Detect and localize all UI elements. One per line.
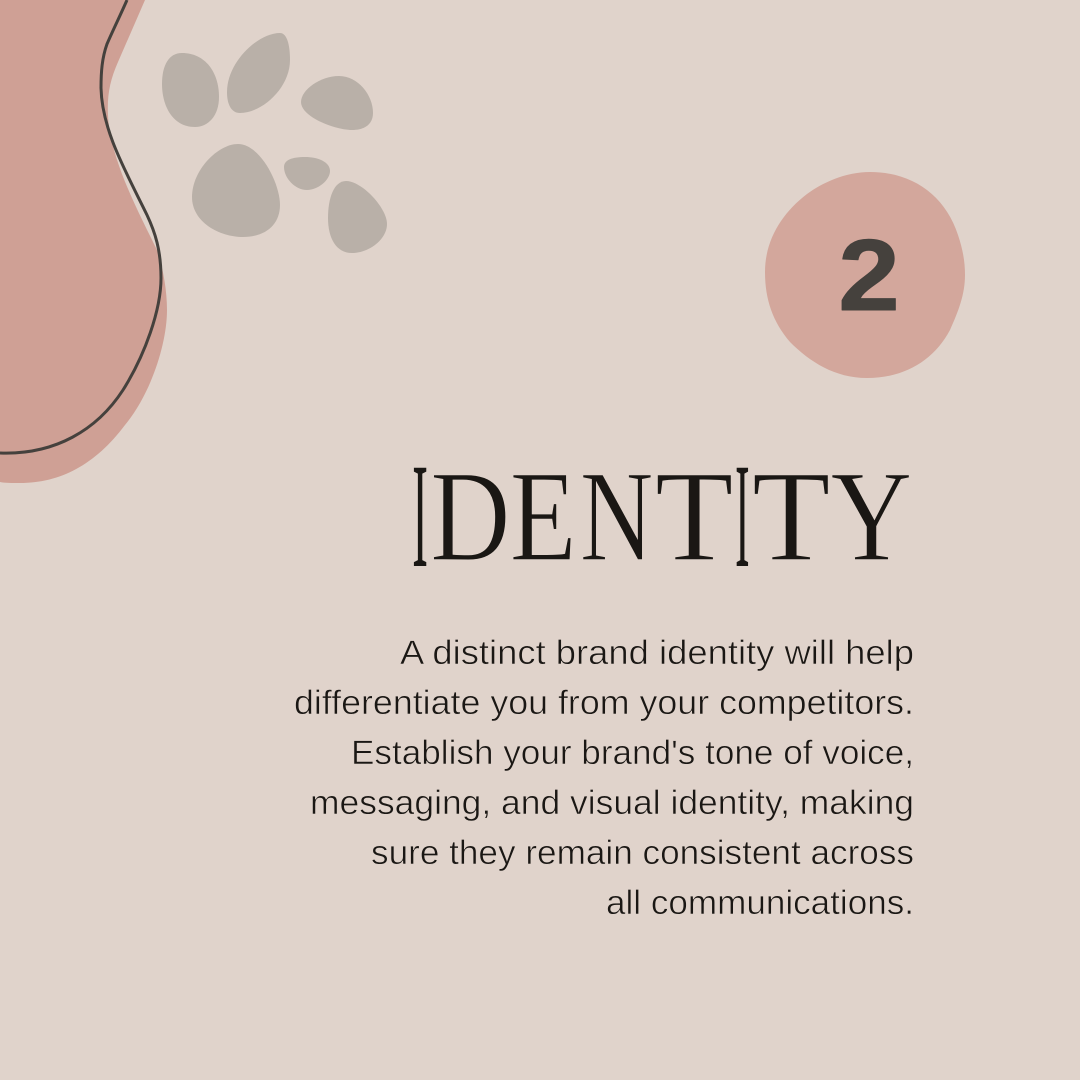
pebble 3 xyxy=(301,76,373,130)
body text: sure they remain consistent across xyxy=(371,834,914,872)
title: T xyxy=(752,444,831,589)
pebble 4 xyxy=(192,144,280,237)
title: I xyxy=(735,433,750,599)
outline curve xyxy=(0,0,161,453)
title: T xyxy=(655,444,734,589)
title xyxy=(412,433,912,599)
body text xyxy=(294,634,914,922)
pebble 6 xyxy=(328,181,387,253)
pebble 5 xyxy=(284,157,330,190)
badge blob xyxy=(765,172,965,378)
body text: all communications. xyxy=(606,884,914,922)
pebble 2 xyxy=(227,33,290,113)
body text: A distinct brand identity will help xyxy=(400,634,914,672)
pebbles cluster xyxy=(162,33,387,253)
pink blob: left xyxy=(0,0,167,483)
title: E xyxy=(510,444,577,589)
body text: differentiate you from your competitors. xyxy=(294,684,914,722)
number 2: 2 xyxy=(838,219,900,332)
title: N xyxy=(580,444,653,589)
number badge xyxy=(765,172,965,378)
body text: messaging, and visual identity, making xyxy=(310,784,914,822)
title: Y xyxy=(830,444,912,589)
body text: Establish your brand's tone of voice, xyxy=(351,734,914,772)
title: D xyxy=(430,444,510,589)
pebble 1 xyxy=(162,53,219,127)
title: I xyxy=(412,433,428,599)
